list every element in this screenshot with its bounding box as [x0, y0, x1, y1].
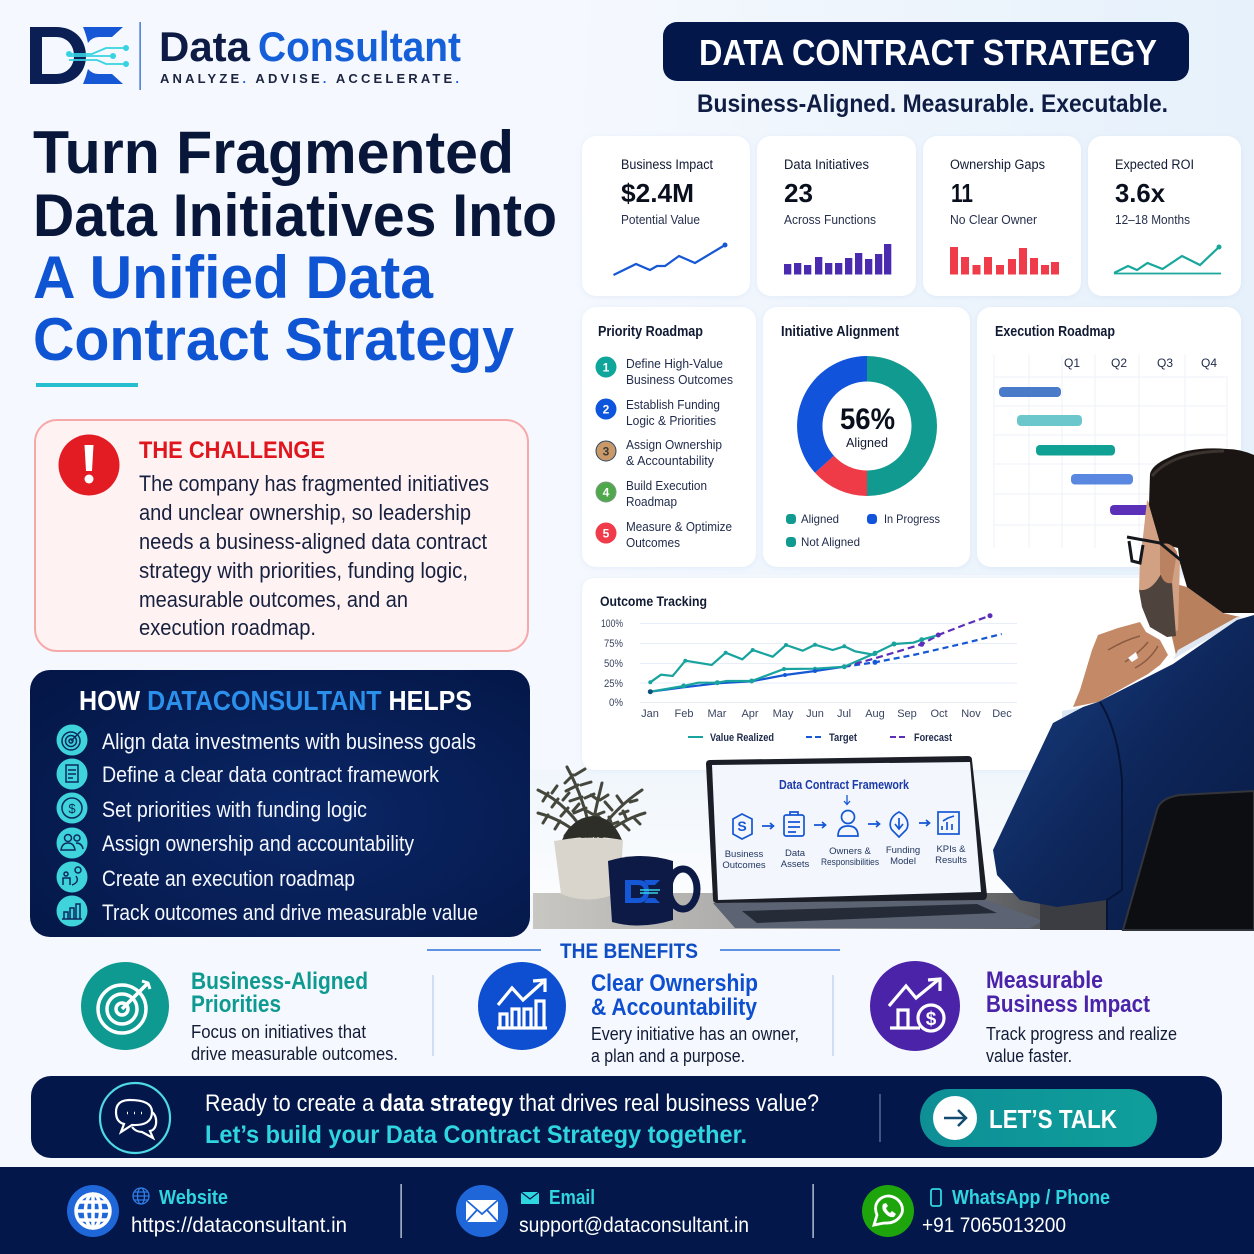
chart legend: Value Realized [710, 732, 774, 744]
benefit: clear ownership: a plan and a purpose. [591, 1046, 745, 1066]
glasses [1127, 537, 1183, 563]
contact: email: support@dataconsultant.in [519, 1214, 749, 1237]
line chart: Nov [961, 708, 981, 720]
icon: growth [870, 961, 960, 1051]
wordmark: ANALYZE. ADVISE. ACCELERATE. [160, 71, 459, 86]
KPI card: ownership gaps [923, 136, 1081, 296]
mug [608, 856, 697, 926]
icon: growth: $ [926, 1009, 937, 1030]
beard stubble [1139, 572, 1176, 637]
strategy title pill [663, 22, 1189, 81]
line chart: Jan [641, 708, 659, 720]
step 5: Measure & Optimize [626, 519, 732, 534]
panel: outcome tracking: Outcome Tracking [600, 593, 707, 609]
chart legend [688, 732, 952, 744]
icon: document [56, 758, 88, 790]
step 1: Business Outcomes [626, 372, 733, 387]
helps heading: HOW DATACONSULTANT HELPS [79, 685, 472, 716]
line chart: Mar [708, 708, 727, 720]
KPI card: data initiatives: Across Functions [784, 212, 876, 227]
chart legend: Forecast [914, 732, 952, 744]
ear [1160, 544, 1177, 583]
line chart: 50% [604, 658, 623, 670]
icon: dollar: $ [68, 801, 76, 816]
chair [1123, 791, 1254, 930]
desk right shade [1040, 893, 1125, 930]
benefit: measurable business impact: Measurable [986, 967, 1103, 994]
KPI card: business impact: Business Impact [621, 157, 713, 172]
benefit: business-aligned priorities: Business-Aligned [191, 968, 368, 995]
challenge text: The company has fragmented initiatives [139, 471, 489, 496]
framework labels: Model [890, 856, 916, 867]
helps list: Assign ownership and accountability [102, 831, 414, 856]
sparkline [1114, 244, 1222, 274]
helps list [102, 729, 478, 925]
challenge text: needs a business-aligned data contract [139, 529, 487, 554]
KPI card: expected ROI: 3.6x [1115, 178, 1166, 208]
benefit: measurable business impact: Track progress and realize [986, 1024, 1177, 1044]
benefit: clear ownership: Every initiative has an owner, [591, 1024, 799, 1044]
panel: execution roadmap [977, 307, 1241, 567]
panel: initiative alignment: Initiative Alignment [781, 323, 899, 340]
KPI card: ownership gaps: 11 [951, 178, 973, 208]
contact: website [67, 1185, 347, 1237]
strategy subtitle: Business-Aligned. Measurable. Executable. [697, 90, 1168, 118]
contact: email [456, 1185, 749, 1237]
helps list: Track outcomes and drive measurable value [102, 900, 478, 925]
framework labels: Data [785, 848, 806, 859]
KPI card: data initiatives: Data Initiatives [784, 157, 869, 172]
step 1: Define High-Value [626, 356, 723, 371]
gantt chart: Q1 [1064, 356, 1080, 370]
step 1 [596, 356, 733, 387]
donut legend [786, 512, 940, 549]
line chart [601, 613, 1017, 720]
benefit: clear ownership: & Accountability [591, 994, 758, 1021]
line chart: Dec [992, 708, 1012, 720]
KPI card: expected ROI: Expected ROI [1115, 157, 1194, 172]
challenge text: measurable outcomes, and an [139, 587, 408, 612]
donut legend: Not Aligned [801, 535, 860, 549]
gantt chart [994, 355, 1227, 548]
strategy title pill: DATA CONTRACT STRATEGY [699, 32, 1157, 73]
step 3: Assign Ownership [626, 437, 722, 452]
step 1: 1 [603, 360, 610, 374]
donut chart [797, 356, 937, 496]
step 2 [596, 397, 720, 428]
challenge text: and unclear ownership, so leadership [139, 500, 471, 525]
gantt chart: Q4 [1201, 356, 1217, 370]
benefit: measurable business impact: value faster. [986, 1046, 1072, 1066]
shirt cuff [1062, 708, 1080, 723]
call to action banner: Let’s build your Data Contract Strategy together. [205, 1121, 747, 1149]
button: let's talk [920, 1089, 1157, 1147]
footer [0, 1167, 1254, 1254]
step 4: 4 [603, 486, 610, 500]
bar sparkline [784, 244, 891, 274]
main headline: Data Initiatives Into [33, 182, 557, 249]
line chart: Jun [806, 708, 824, 720]
icon: chart [478, 962, 566, 1050]
collar [1173, 617, 1245, 660]
main headline [33, 119, 557, 387]
icon: warning [58, 434, 120, 496]
KPI card: ownership gaps: Ownership Gaps [950, 157, 1045, 172]
framework labels: Funding [886, 845, 920, 856]
icon: people [56, 828, 88, 858]
helps list: Set priorities with funding logic [102, 797, 367, 822]
gantt chart: Q3 [1157, 356, 1173, 370]
framework labels: Assets [781, 859, 810, 870]
neck [1172, 583, 1240, 655]
laptop screen: Data Contract Framework [779, 778, 909, 792]
step 3: 3 [603, 444, 610, 458]
CTA text: Ready to create a data strategy that drives real business value? [205, 1090, 819, 1117]
donut chart: Aligned [846, 435, 888, 450]
chart legend: Target [829, 732, 857, 744]
contact: website: https://dataconsultant.in [131, 1214, 347, 1237]
mug logo [625, 880, 660, 903]
benefit: business-aligned priorities: drive measurable outcomes. [191, 1044, 398, 1064]
framework labels: Responsibilities [821, 857, 879, 868]
KPI card: expected ROI: 12–18 Months [1115, 212, 1190, 227]
call to action banner [31, 1076, 1222, 1158]
step 5: 5 [603, 526, 610, 540]
logo mark [30, 27, 129, 84]
KPI card: business impact [582, 136, 750, 296]
line chart: 100% [601, 618, 623, 630]
line chart: Oct [930, 708, 948, 720]
KPI card: business impact: Potential Value [621, 212, 700, 227]
step 3 [596, 437, 722, 468]
panel: the challenge [35, 420, 528, 651]
benefit: clear ownership: Clear Ownership [591, 970, 758, 997]
framework labels: KPIs & [936, 844, 966, 855]
icon: dollar [56, 792, 88, 824]
leaves [538, 767, 645, 842]
main headline: Contract Strategy [33, 306, 515, 373]
gantt chart: Q2 [1111, 356, 1127, 370]
helps list: Define a clear data contract framework [102, 762, 440, 787]
challenge text: execution roadmap. [139, 615, 316, 640]
step 5: Outcomes [626, 535, 680, 550]
arrow down [844, 795, 850, 804]
contact: email: Email [549, 1187, 595, 1209]
benefit: business-aligned priorities: Focus on initiatives that [191, 1022, 366, 1042]
icon: target [56, 724, 88, 756]
step 4: Build Execution [626, 478, 707, 493]
step 2: Establish Funding [626, 397, 720, 412]
line chart: Feb [675, 708, 693, 720]
step 4: Roadmap [626, 494, 677, 509]
donut legend: Aligned [801, 512, 839, 526]
framework labels: Results [935, 855, 967, 866]
line chart: May [773, 708, 794, 720]
benefit: measurable business impact: Business Impact [986, 991, 1150, 1018]
icon: chat [100, 1083, 170, 1153]
pot [554, 838, 623, 900]
step 4 [596, 478, 707, 509]
helps list: Create an execution roadmap [102, 866, 355, 891]
framework labels: Business [725, 849, 764, 860]
sparkline [614, 242, 728, 275]
benefit: measurable business impact [870, 961, 1177, 1066]
hand [1073, 622, 1168, 707]
challenge text [139, 471, 489, 640]
framework labels: Owners & [829, 846, 872, 857]
line chart: Sep [897, 708, 917, 720]
line chart: Apr [741, 708, 759, 720]
line chart: 75% [604, 638, 623, 650]
contact: whatsapp phone: WhatsApp / Phone [952, 1187, 1110, 1209]
man at desk [993, 448, 1254, 930]
line chart: Jul [837, 708, 851, 720]
panel: execution roadmap: Execution Roadmap [995, 323, 1115, 340]
panel: outcome tracking [582, 578, 1254, 770]
benefit: business-aligned priorities [81, 962, 398, 1064]
wordmark [159, 23, 461, 86]
contact: website: Website [159, 1187, 228, 1209]
KPI card: ownership gaps: No Clear Owner [950, 212, 1038, 227]
main headline: Turn Fragmented [33, 119, 514, 186]
KPI card: business impact: $2.4M [621, 178, 694, 208]
framework icons [733, 810, 959, 839]
framework icons: S [737, 818, 747, 834]
helps list: Align data investments with business goals [102, 729, 476, 754]
benefit: business-aligned priorities: Priorities [191, 991, 281, 1018]
challenge text: strategy with priorities, funding logic, [139, 558, 468, 583]
framework labels: Outcomes [722, 860, 766, 871]
line chart: 25% [604, 678, 623, 690]
jacket [993, 615, 1254, 930]
benefit: clear ownership [478, 962, 799, 1066]
panel: priority roadmap [582, 307, 756, 567]
KPI card: expected ROI [1088, 136, 1241, 296]
icon: chart [56, 896, 88, 926]
wordmark: Data [159, 23, 251, 70]
desk [533, 893, 1110, 929]
wordmark: Consultant [258, 23, 461, 70]
step 5 [596, 519, 732, 550]
line chart: 0% [609, 697, 623, 709]
face [1139, 500, 1180, 637]
step 3: & Accountability [626, 453, 714, 468]
step 2: Logic & Priorities [626, 413, 716, 428]
button: let's talk: LET’S TALK [989, 1104, 1117, 1134]
contact: whatsapp phone [862, 1185, 1110, 1237]
line chart: Aug [865, 708, 885, 720]
panel: priority roadmap: Priority Roadmap [598, 323, 703, 340]
panel: initiative alignment [763, 307, 970, 567]
icon: target [81, 962, 169, 1050]
contact: whatsapp phone: +91 7065013200 [922, 1214, 1066, 1237]
challenge heading: THE CHALLENGE [139, 437, 325, 464]
panel: how DataConsultant helps [30, 670, 530, 937]
laptop screen [712, 762, 981, 900]
benefits heading: THE BENEFITS [560, 940, 698, 963]
donut chart: 56% [840, 403, 895, 436]
donut legend: In Progress [884, 512, 940, 526]
plant [538, 767, 645, 900]
main headline: A Unified Data [33, 244, 434, 311]
bar sparkline [950, 247, 1059, 274]
framework labels [722, 844, 967, 871]
laptop [706, 756, 1043, 928]
logo: Data Consultant [30, 22, 461, 90]
icon: roadmap [56, 862, 88, 892]
KPI card: data initiatives [757, 136, 916, 296]
hair [1149, 448, 1254, 613]
KPI card: data initiatives: 23 [784, 178, 813, 208]
step 2: 2 [603, 402, 610, 416]
